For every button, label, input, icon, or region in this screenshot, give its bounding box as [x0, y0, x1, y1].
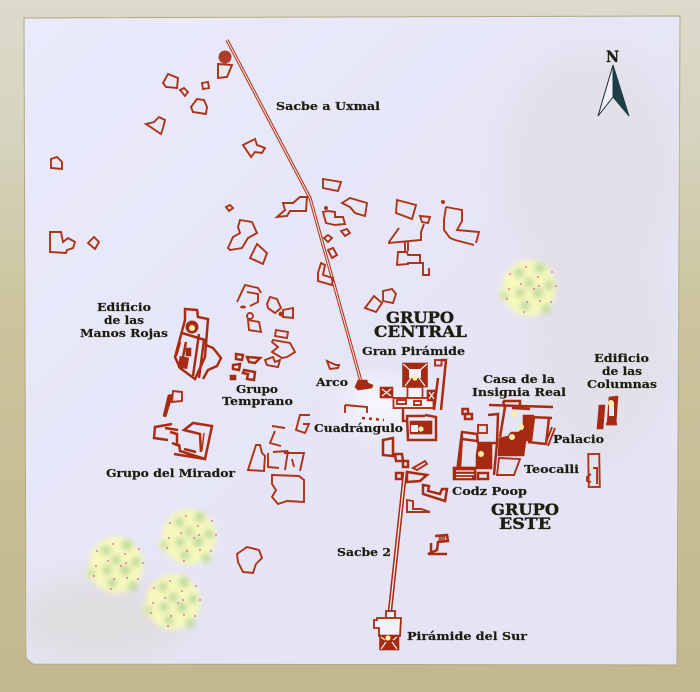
heading: Grupo Central	[374, 308, 467, 341]
label: Casa de la Insignia Real	[472, 372, 567, 399]
label: Piramide del Sur: Pirámide del Sur	[407, 629, 528, 643]
Piramide del Sur building	[374, 611, 401, 650]
Edificio de las Manos Rojas building plan	[175, 309, 221, 379]
north arrow	[598, 47, 629, 116]
road: Sacbe a Uxmal	[227, 40, 362, 385]
label: Grupo Temprano: Grupo	[236, 382, 278, 396]
heading: Grupo Este: GRUPO	[491, 500, 559, 519]
label: Edificio de las Columnas: Edificio	[594, 351, 649, 365]
tree clusters	[86, 260, 557, 630]
label: Edificio de las Columnas: Columnas	[587, 377, 657, 391]
label: Gran Piramide: Gran Pirámide	[362, 344, 465, 358]
label: Edificio de las Manos Rojas: Manos Rojas	[80, 326, 168, 340]
heading: Grupo Central: CENTRAL	[374, 322, 467, 341]
heading: Grupo Este: ESTE	[499, 514, 551, 533]
label: Grupo Temprano	[222, 382, 293, 408]
label: Grupo del Mirador: Grupo del Mirador	[106, 466, 236, 480]
label: Codz Poop: Codz Poop	[452, 484, 527, 498]
label: Casa de la Insignia Real: Insignia Real	[472, 385, 567, 399]
label: Sacbe a Uxmal: Sacbe a Uxmal	[276, 99, 381, 113]
north-west and scattered outlying buildings	[50, 50, 479, 573]
Edificio de las Columnas building	[597, 396, 618, 429]
north arrow: N	[606, 47, 619, 66]
heading: Grupo Central: GRUPO	[386, 308, 454, 327]
label: Edificio de las Columnas	[587, 351, 657, 391]
heading: Grupo Este	[491, 500, 559, 533]
label: Edificio de las Manos Rojas: de las	[104, 313, 144, 327]
label: Arco: Arco	[315, 375, 348, 389]
label: Grupo Temprano: Temprano	[222, 394, 293, 408]
label: Cuadrangulo: Cuadrángulo	[314, 421, 403, 435]
label: Edificio de las Manos Rojas	[80, 300, 168, 340]
road: Sacbe 2	[390, 472, 405, 611]
label: Edificio de las Columnas: de las	[602, 364, 642, 378]
label: Sacbe 2: Sacbe 2	[337, 545, 391, 559]
Grupo Temprano building plan	[230, 354, 260, 380]
Arco building	[355, 380, 373, 390]
Grupo Este building complex	[453, 401, 600, 487]
label: Edificio de las Manos Rojas: Edificio	[97, 300, 151, 314]
Grupo Central: Gran Piramide complex	[345, 360, 448, 554]
Grupo del Mirador building plan	[154, 391, 212, 459]
label: Casa de la Insignia Real: Casa de la	[483, 372, 556, 386]
label: Teocalli: Teocalli	[524, 462, 580, 476]
label: Palacio: Palacio	[553, 432, 604, 446]
